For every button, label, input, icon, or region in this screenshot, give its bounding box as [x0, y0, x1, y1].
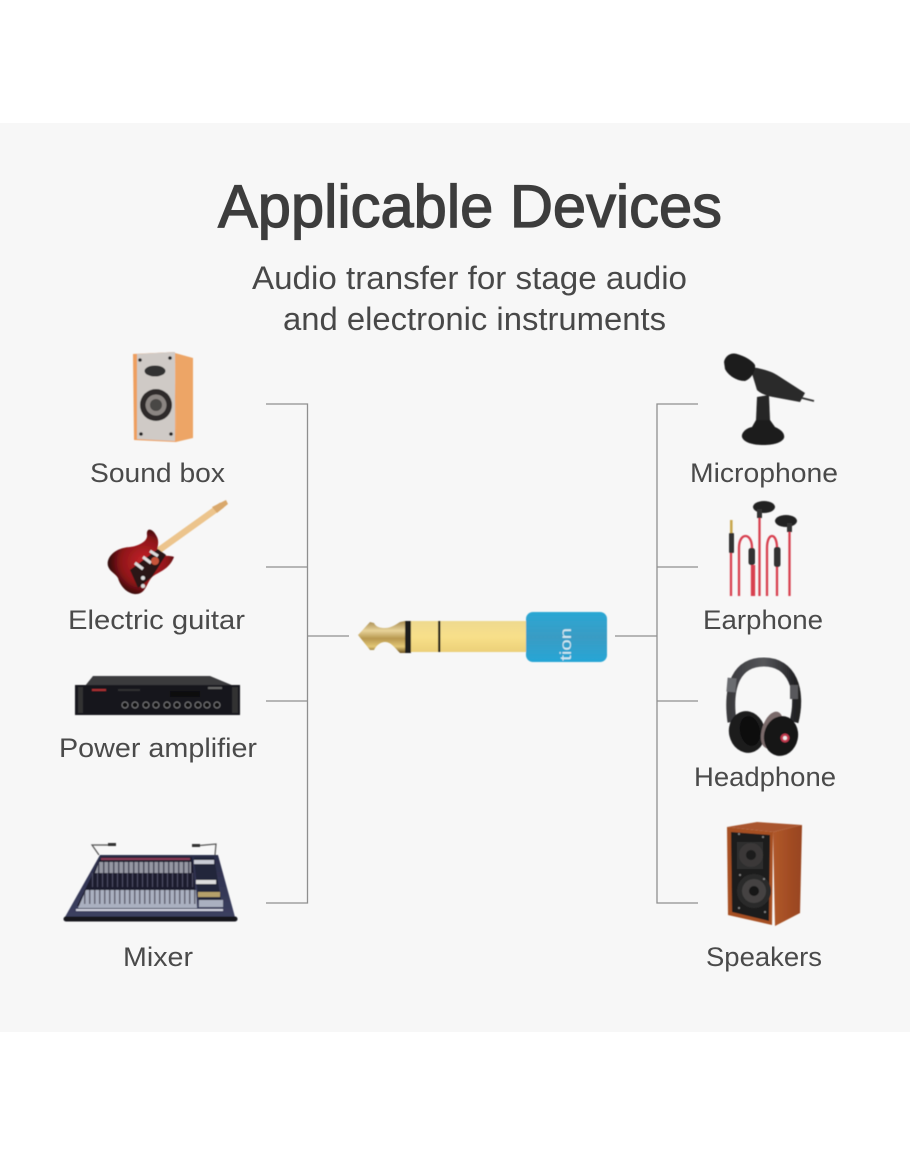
subtitle: Audio transfer for stage audio	[252, 260, 687, 296]
icon: speakers	[727, 822, 802, 926]
icon: earphone	[729, 501, 797, 596]
label: microphone: Microphone	[690, 458, 838, 488]
label: power amplifier: Power amplifier	[59, 733, 257, 763]
subtitle: and electronic instruments	[283, 301, 666, 337]
icon: mixer	[65, 843, 235, 919]
icon: headphone	[725, 662, 802, 759]
title: Applicable Devices	[218, 173, 722, 240]
icon: sound box	[133, 352, 193, 442]
icon: adapter plug: ntion	[558, 628, 575, 672]
icon: adapter plug	[358, 611, 608, 663]
label: sound box: Sound box	[90, 458, 226, 488]
label: mixer: Mixer	[123, 942, 193, 972]
label: headphone: Headphone	[694, 762, 836, 792]
right connector bracket	[615, 404, 698, 903]
left connector bracket	[266, 404, 349, 903]
label: earphone: Earphone	[703, 605, 823, 635]
label: speakers: Speakers	[706, 942, 822, 972]
subtitle	[252, 260, 687, 337]
infographic canvas	[61, 182, 837, 972]
icon: power amplifier	[75, 676, 240, 715]
label: electric guitar: Electric guitar	[68, 605, 245, 635]
icon: microphone	[724, 353, 814, 445]
panel: background	[0, 123, 910, 1032]
icon: electric guitar	[108, 500, 228, 594]
